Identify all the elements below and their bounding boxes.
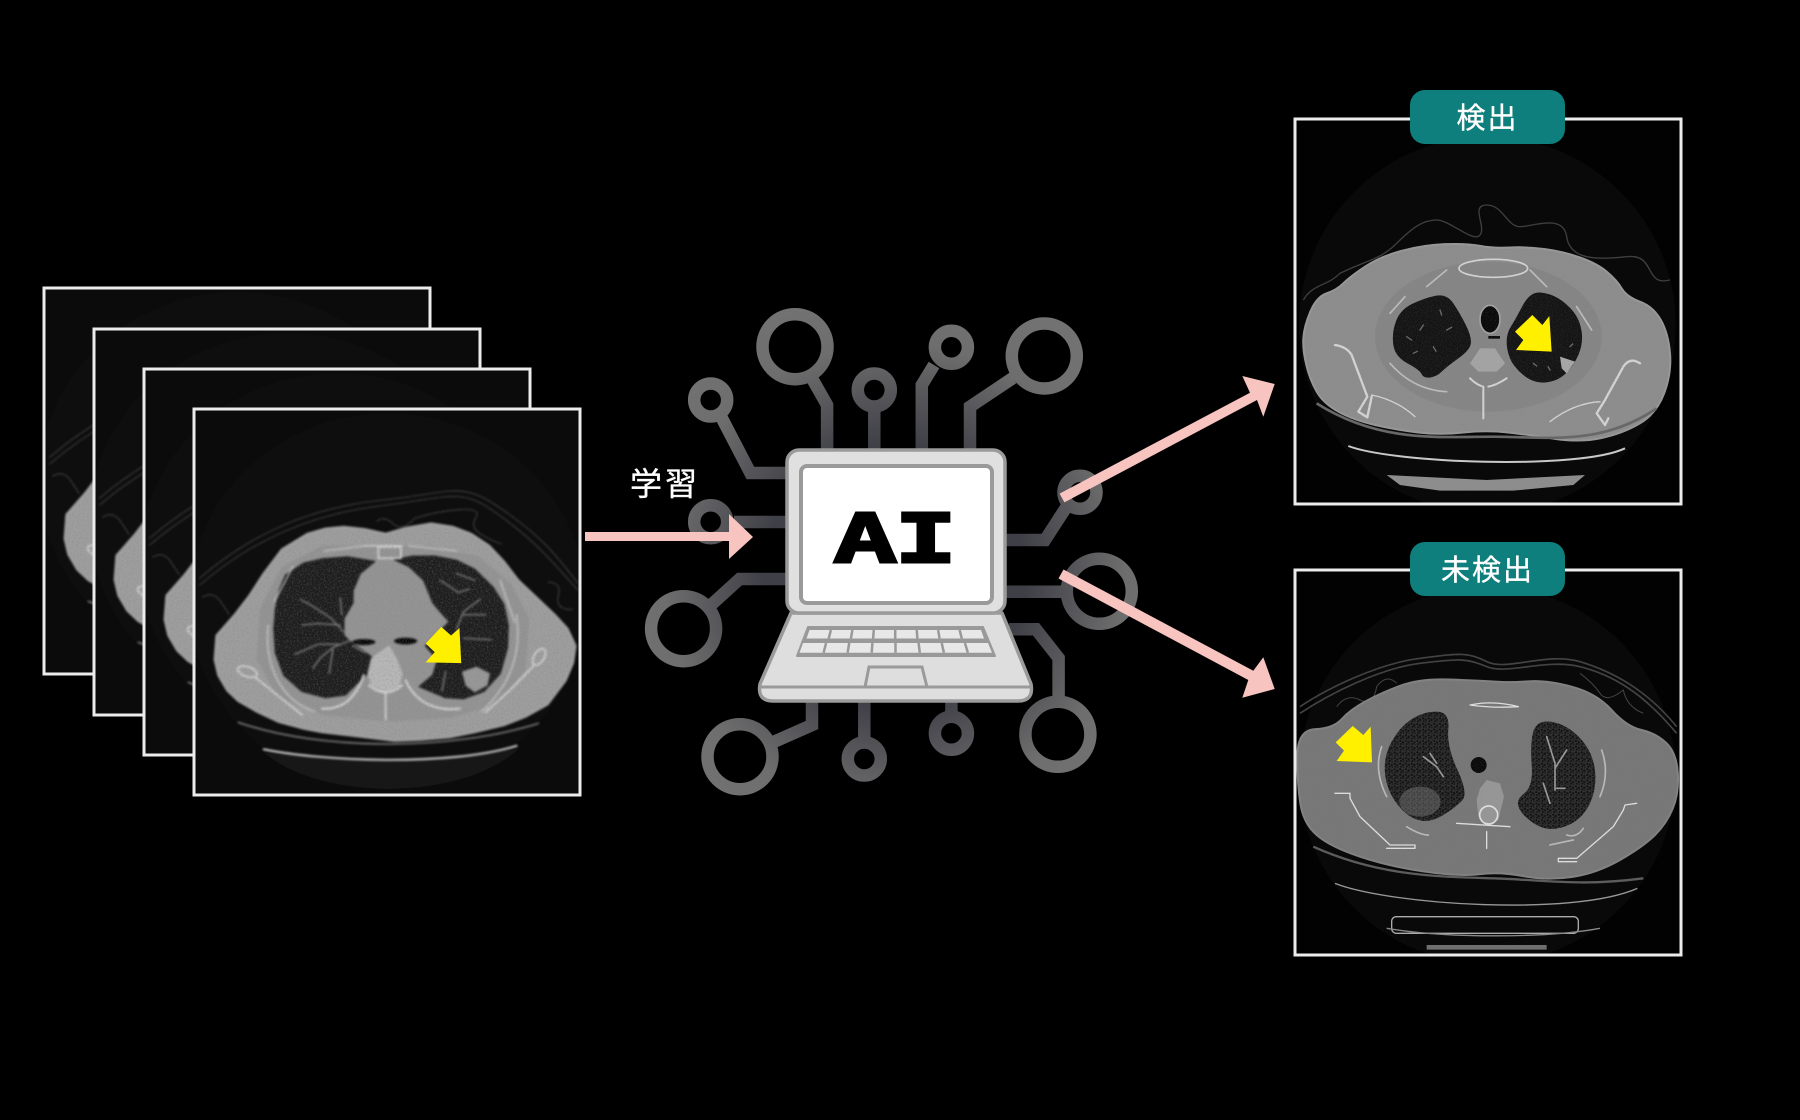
CT slice 2 xyxy=(89,329,486,715)
arrow: to detected xyxy=(1060,376,1275,502)
panel: detected result xyxy=(1294,90,1682,513)
laptop base xyxy=(760,613,1031,701)
CT slice 1 (back) xyxy=(39,288,436,674)
laptop screen xyxy=(801,466,992,603)
CT slice 3 xyxy=(139,369,536,755)
trackpad xyxy=(865,667,927,687)
icon: yellow arrow (missed) xyxy=(1336,726,1372,762)
CT slice 4 (front) with yellow arrow xyxy=(189,409,586,795)
AI text: AI xyxy=(835,501,956,585)
frame: detected xyxy=(1295,119,1681,504)
icon: laptop with AI xyxy=(760,450,1032,701)
keyboard xyxy=(797,627,995,656)
CT scan: missed xyxy=(1296,596,1679,954)
badge: missed xyxy=(1410,542,1565,596)
circuit traces and nodes xyxy=(651,314,1132,789)
arrow: to missed xyxy=(1058,570,1275,698)
CT scan: detected xyxy=(1299,144,1676,502)
badge: detected: 検出 xyxy=(1456,102,1519,135)
icon: yellow arrow (detected) xyxy=(1515,315,1552,352)
panel: missed result xyxy=(1294,542,1682,963)
laptop lid xyxy=(787,450,1005,613)
frame: missed xyxy=(1295,570,1681,955)
icon: yellow arrow (training) xyxy=(426,627,461,663)
badge: missed: 未検出 xyxy=(1441,554,1534,587)
label: learning: 学習 xyxy=(630,466,700,502)
arrow: learning input xyxy=(585,514,753,559)
panel: stack of training CT scans xyxy=(39,288,586,795)
badge: detected xyxy=(1410,90,1565,144)
